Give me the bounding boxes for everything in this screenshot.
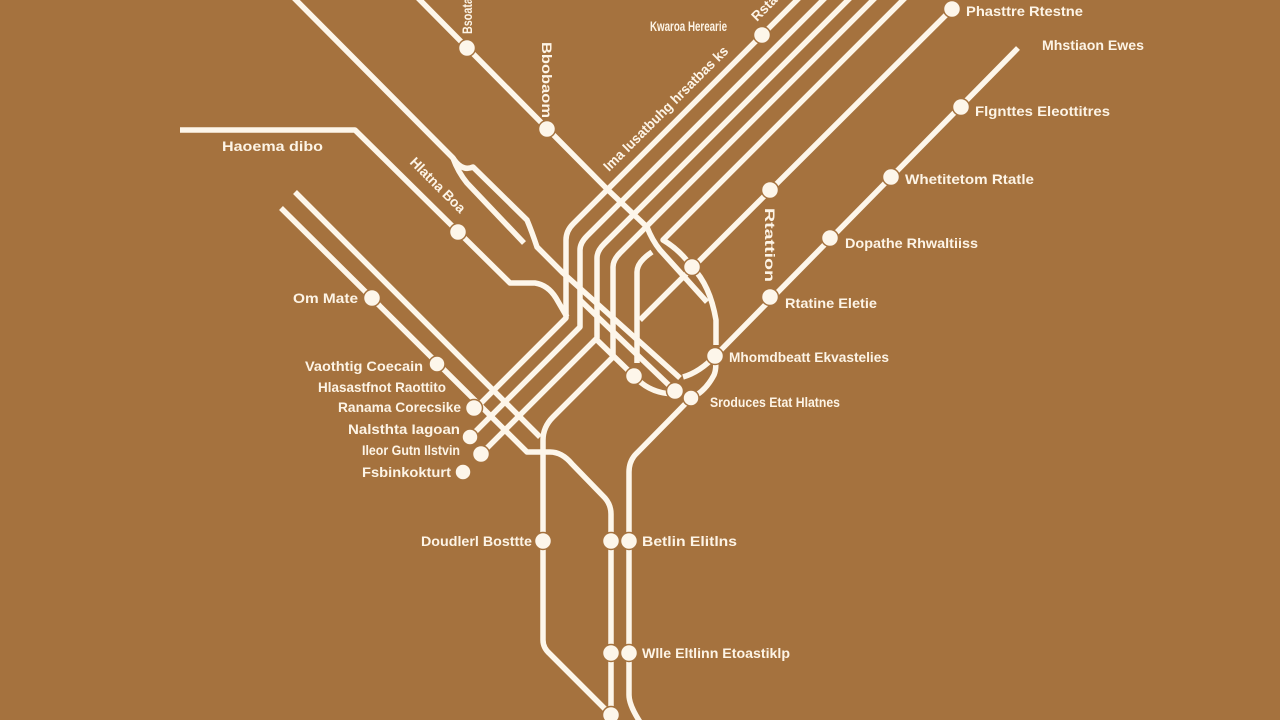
station labels: Mhstiaon Ewes [1042, 37, 1144, 53]
station labels: Hlatna Boa [407, 154, 469, 216]
station labels: Doudlerl Bosttte [421, 533, 532, 549]
station labels: Wlle Eltlinn Etoastiklp [642, 645, 790, 661]
station labels [222, 0, 1144, 661]
station labels: Nalsthta Iagoan [348, 421, 460, 437]
station labels: Ranama Corecsike [338, 399, 461, 415]
station labels: Om Mate [293, 290, 358, 306]
station labels: Bbobaom [539, 42, 555, 118]
station labels: Kwaroa Herearie [650, 18, 727, 34]
station labels: Ileor Gutn Ilstvin [362, 442, 460, 458]
station labels: Mhomdbeatt Ekvastelies [729, 349, 889, 365]
station labels: Rtatine Eletie [785, 295, 877, 311]
station labels: Vaothtig Coecain [305, 358, 423, 374]
station labels: Rtattion [762, 208, 778, 282]
station labels: Flgnttes Eleottitres [975, 103, 1110, 119]
station labels: Fsbinkokturt [362, 464, 451, 480]
station labels: Phasttre Rtestne [966, 3, 1083, 19]
station labels: Dopathe Rhwaltiiss [845, 235, 978, 251]
station labels: Hlasastfnot Raottito [318, 379, 446, 395]
route lines [180, 0, 1018, 720]
station labels: Ima Iusatbuhg hrsatbas ks [600, 42, 731, 174]
station labels: Whetitetom Rtatle [905, 171, 1034, 187]
station labels: Betlin Elitlns [642, 533, 737, 549]
station labels: Haoema dibo [222, 138, 323, 154]
stations [364, 0, 970, 720]
station labels: Sroduces Etat Hlatnes [710, 394, 840, 410]
